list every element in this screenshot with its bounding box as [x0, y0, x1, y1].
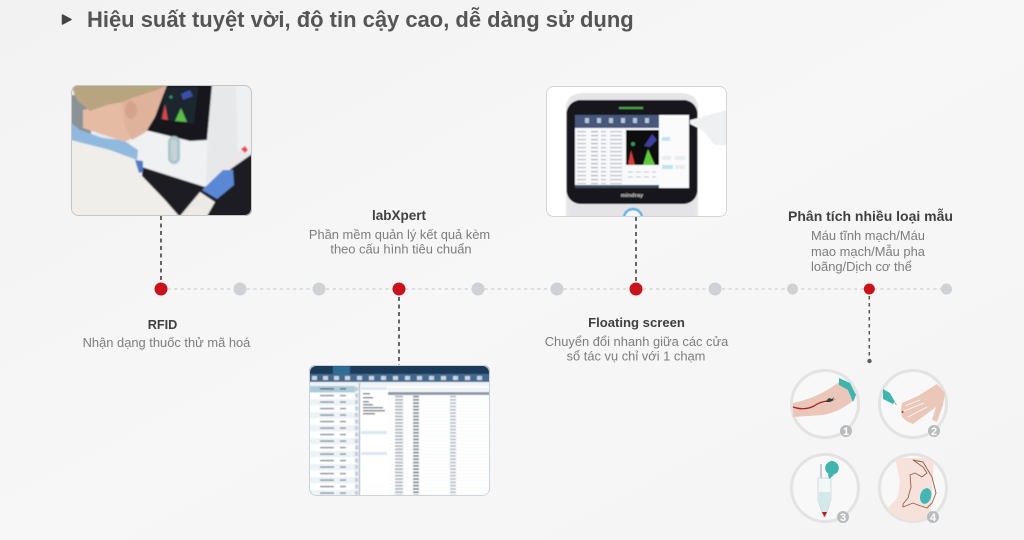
- text: Floating screen: sổ tác vụ chỉ với 1 chạm: [567, 348, 705, 364]
- text: sample types: Máu tĩnh mạch/Máu: [811, 228, 925, 243]
- left glove: [135, 160, 143, 173]
- photo: technician with analyzer: [71, 85, 252, 216]
- finger: [690, 110, 727, 145]
- timeline: [154, 282, 952, 296]
- text: sample types: Phân tích nhiều loại mẫu: [788, 208, 953, 224]
- icon: venous blood: [792, 370, 858, 438]
- text: labXpert: [309, 208, 490, 256]
- table rows: [577, 130, 625, 184]
- title: Hiệu suất tuyệt vời, độ tin cậy cao, dễ dàng sử dụng: [87, 7, 634, 32]
- icon: body fluid: [880, 454, 946, 525]
- screenshot: labXpert software: [309, 365, 490, 496]
- text: sample types: loãng/Dịch cơ thể: [811, 259, 912, 274]
- text: Floating screen: [545, 315, 729, 364]
- right glove: [202, 170, 234, 199]
- screen: [145, 85, 212, 141]
- connector: floating screen photo to timeline: [635, 217, 637, 283]
- neck: [83, 100, 137, 142]
- scattergrams: [626, 130, 659, 165]
- text: sample types: mao mạch/Mẫu pha: [811, 244, 926, 259]
- face: [122, 85, 167, 140]
- text: Floating screen: Chuyển đổi nhanh giữa các cửa: [545, 334, 729, 349]
- connector: labXpert to screenshot: [398, 297, 400, 365]
- icon: capillary blood: [880, 370, 946, 438]
- text: labXpert: Phần mềm quản lý kết quả kèm: [309, 227, 490, 242]
- connector: sample types to icons: [867, 296, 872, 363]
- brand and button: mindray: [621, 193, 644, 199]
- collar: [71, 123, 138, 160]
- text: Floating screen: Floating screen: [588, 315, 685, 330]
- icon: venous blood: 1: [843, 426, 849, 438]
- analyzer right side: [207, 128, 220, 182]
- hair: [71, 85, 168, 111]
- detail panel: [361, 387, 387, 390]
- coat: [140, 176, 180, 215]
- side dialog: [659, 115, 689, 185]
- tube: [228, 150, 244, 171]
- text: RFID: [83, 318, 251, 350]
- connector: RFID photo to timeline: [160, 216, 162, 283]
- icon: capillary blood: 2: [931, 426, 937, 438]
- text: RFID: RFID: [148, 318, 177, 332]
- sample door: [168, 136, 180, 164]
- icon: diluted sample: [792, 454, 858, 524]
- icon: diluted sample: 3: [840, 512, 846, 524]
- text: labXpert: theo cấu hình tiêu chuẩn: [330, 242, 472, 256]
- text: labXpert: labXpert: [372, 208, 427, 223]
- result table: [388, 388, 490, 391]
- text: sample types: [788, 208, 953, 274]
- icon: body fluid: 4: [930, 512, 937, 524]
- text: RFID: Nhận dạng thuốc thử mã hoá: [83, 335, 251, 350]
- photo: floating screen touch display: [546, 86, 727, 227]
- bench: [142, 154, 252, 216]
